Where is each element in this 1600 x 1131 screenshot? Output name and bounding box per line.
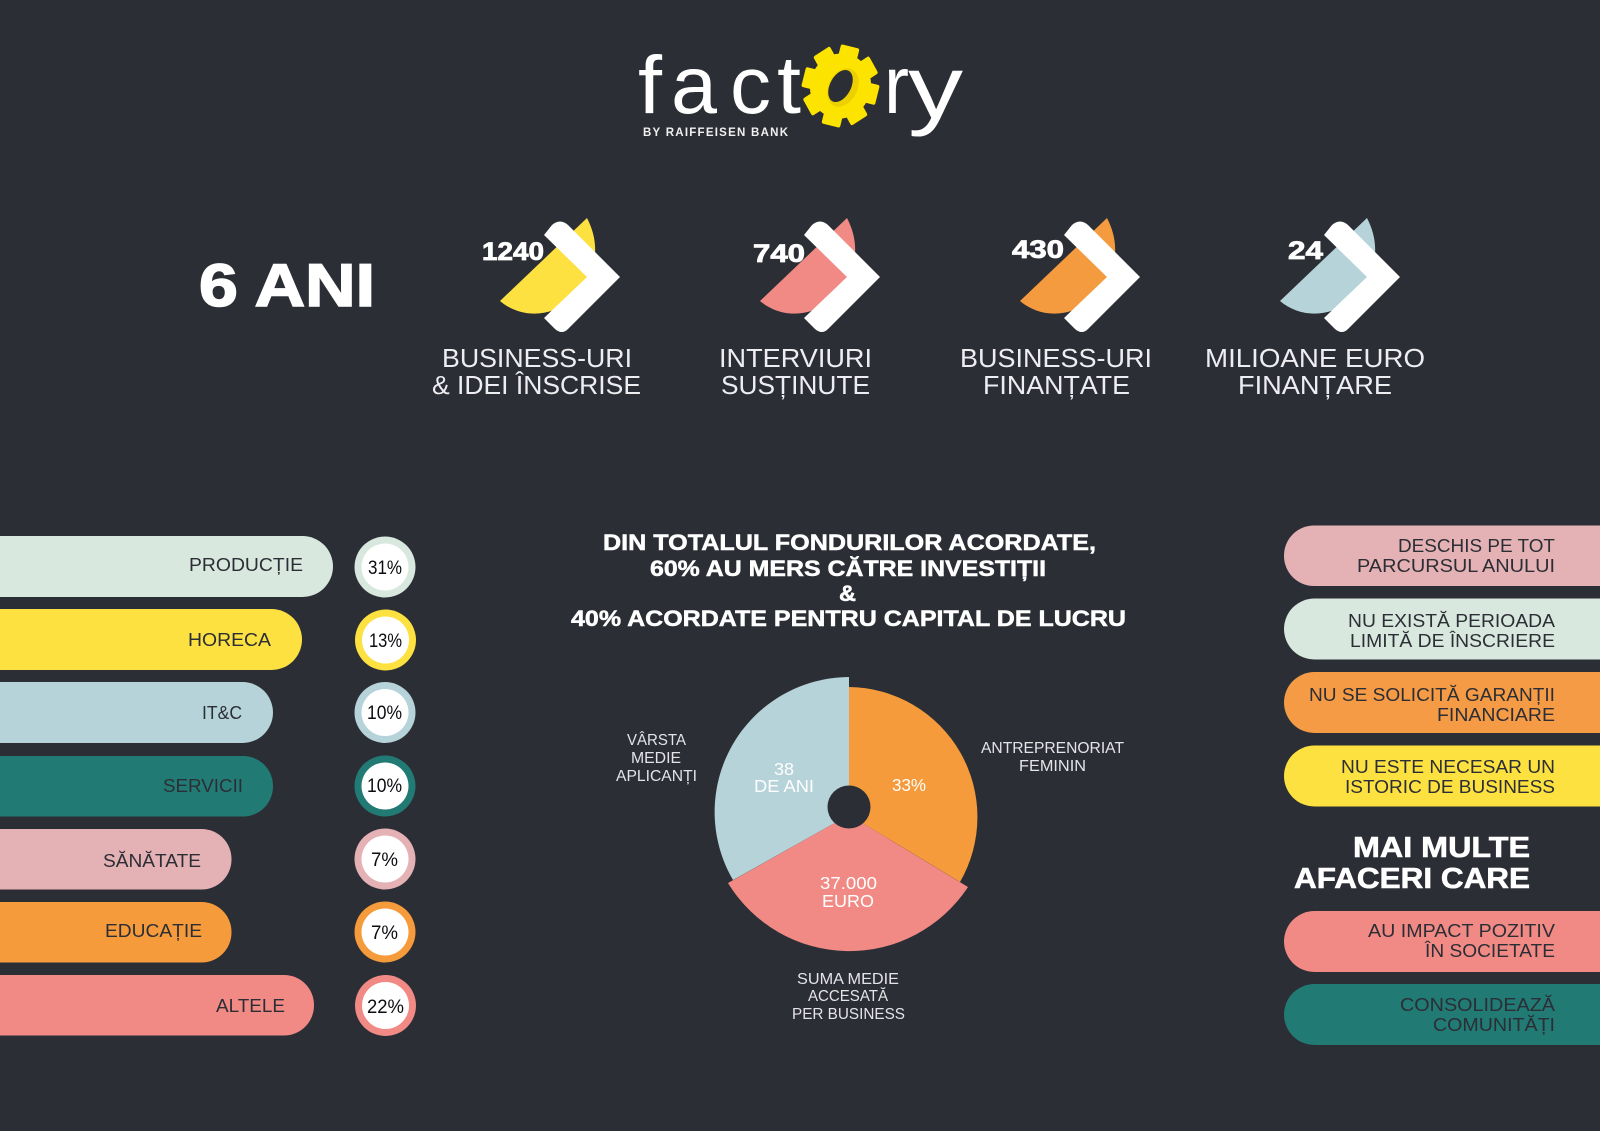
- number: 24: [1288, 237, 1323, 265]
- logo wordmark: f: [638, 40, 662, 131]
- panel: sectors bar list: [0, 536, 416, 1036]
- stat: 24 milioane euro: [1205, 218, 1425, 400]
- heading: funds allocation: &: [839, 581, 856, 606]
- label: BUSINESS-URI: [442, 343, 632, 373]
- pie value: age: DE ANI: [754, 776, 814, 796]
- pill: perioada: NU EXISTĂ PERIOADA: [1348, 610, 1556, 631]
- pill: garantii: FINANCIARE: [1437, 704, 1555, 725]
- label: [432, 343, 641, 400]
- bar: educatie: [0, 902, 416, 962]
- pie value: age: 38: [774, 759, 794, 779]
- pill: istoric: NU ESTE NECESAR UN: [1341, 756, 1555, 777]
- pill: impact: AU IMPACT POZITIV: [1368, 920, 1556, 941]
- pill: deschis: DESCHIS PE TOT: [1398, 535, 1555, 556]
- heading: mai multe afaceri care: AFACERI CARE: [1294, 863, 1530, 895]
- stat: 430 business-uri finantate: [960, 218, 1152, 400]
- bar: sanatate: SĂNĂTATE: [103, 850, 201, 871]
- pie slice: orange: [849, 687, 977, 882]
- icon: coral half disc with chevron: [760, 218, 880, 332]
- pill: impact: ÎN SOCIETATE: [1424, 940, 1555, 961]
- heading: funds allocation: 40% ACORDATE PENTRU CAPITAL DE LUCRU: [571, 606, 1126, 631]
- logo wordmark: c: [730, 40, 771, 131]
- bar: sanatate: 7%: [371, 850, 398, 871]
- pill: istoric: ISTORIC DE BUSINESS: [1345, 776, 1555, 797]
- pie label: varsta medie aplicanti: APLICANȚI: [616, 768, 697, 785]
- heading: mai multe afaceri care: MAI MULTE: [1353, 832, 1530, 864]
- label: MILIOANE EURO: [1205, 343, 1425, 373]
- pill: deschis: [1284, 526, 1600, 586]
- pie centre hole: [828, 786, 870, 828]
- pill: deschis: PARCURSUL ANULUI: [1357, 555, 1555, 576]
- label: [1205, 343, 1425, 400]
- pie slice: coral: [728, 815, 968, 951]
- bar: servicii: [0, 756, 416, 816]
- panel: business impact: [1284, 911, 1600, 1045]
- bar: altele: 22%: [367, 997, 404, 1018]
- bar: educatie: EDUCAȚIE: [105, 920, 202, 941]
- bar: productie: [0, 536, 416, 598]
- bar: horeca: 13%: [369, 631, 402, 652]
- bar: it&c: [0, 682, 416, 743]
- icon: yellow gear: [794, 37, 887, 135]
- pie label: varsta medie aplicanti: VÂRSTA: [627, 730, 686, 749]
- pie slice: blue: [715, 677, 849, 880]
- label: [719, 343, 872, 400]
- pill: istoric: [1284, 746, 1600, 806]
- pill: comunitati: COMUNITĂȚI: [1433, 1014, 1555, 1035]
- logo wordmark: [638, 37, 964, 137]
- heading: funds allocation: [571, 530, 1126, 631]
- pill: comunitati: [1284, 984, 1600, 1045]
- pie label: antreprenoriat feminin: [981, 740, 1124, 775]
- number: 430: [1012, 236, 1064, 264]
- pie value: female: 33%: [892, 775, 926, 795]
- logo wordmark: t: [777, 40, 801, 131]
- pie label: varsta medie aplicanti: MEDIE: [631, 750, 681, 767]
- pie label: suma medie: ACCESATĂ: [808, 986, 888, 1005]
- panel: program advantages: [1284, 526, 1600, 806]
- logo wordmark: y: [908, 37, 964, 137]
- pie value: amount: EURO: [822, 891, 874, 911]
- pie value: amount: 37.000: [820, 873, 877, 893]
- heading: funds allocation: 60% AU MERS CĂTRE INVESTIȚII: [650, 556, 1046, 581]
- pill: perioada: [1284, 598, 1600, 660]
- icon: yellow half disc with chevron: [500, 218, 620, 332]
- logo wordmark: r: [884, 40, 909, 131]
- bar: horeca: [0, 609, 416, 670]
- heading: 6 ani: 6 ANI: [199, 252, 375, 319]
- pill: comunitati: CONSOLIDEAZĂ: [1400, 994, 1556, 1015]
- label: FINANȚATE: [983, 370, 1130, 400]
- pill: garantii: [1284, 672, 1600, 733]
- logo tagline: BY RAIFFEISEN BANK: [643, 127, 789, 139]
- chart: pie: [715, 677, 977, 951]
- bar: productie: 31%: [368, 558, 402, 579]
- bar: sanatate: [0, 828, 416, 890]
- pill: garantii: NU SE SOLICITĂ GARANȚII: [1309, 684, 1555, 705]
- bar: altele: [0, 975, 416, 1036]
- label: INTERVIURI: [719, 343, 872, 373]
- bar: it&c: IT&C: [202, 702, 242, 723]
- bar: altele: ALTELE: [216, 995, 285, 1016]
- label: FINANȚARE: [1238, 370, 1392, 400]
- pill: impact: [1284, 911, 1600, 972]
- bar: servicii: SERVICII: [163, 775, 243, 796]
- pie value: amount: [820, 873, 877, 911]
- pie label: varsta medie aplicanti: [616, 730, 697, 785]
- icon: orange half disc with chevron: [1020, 218, 1140, 332]
- number: 1240: [482, 238, 544, 266]
- logo wordmark: a: [671, 40, 717, 131]
- icon: blue half disc with chevron: [1280, 218, 1400, 332]
- number: 740: [753, 240, 805, 268]
- label: BUSINESS-URI: [960, 343, 1152, 373]
- heading: mai multe afaceri care: [1294, 832, 1530, 895]
- label: & IDEI ÎNSCRISE: [432, 370, 641, 400]
- bar: productie: PRODUCȚIE: [189, 554, 303, 575]
- bar: it&c: 10%: [367, 703, 402, 724]
- stat: 740 interviuri: [719, 218, 880, 400]
- pie label: antreprenoriat feminin: FEMININ: [1019, 758, 1086, 775]
- logo: factory by Raiffeisen Bank: [638, 37, 964, 139]
- bar: horeca: HORECA: [188, 629, 272, 650]
- pie label: suma medie: [792, 971, 905, 1023]
- heading: funds allocation: DIN TOTALUL FONDURILOR ACORDATE,: [603, 530, 1096, 555]
- bar: servicii: 10%: [367, 776, 402, 797]
- pie label: antreprenoriat feminin: ANTREPRENORIAT: [981, 740, 1124, 757]
- pie label: suma medie: PER BUSINESS: [792, 1006, 905, 1023]
- bar: educatie: 7%: [371, 923, 398, 944]
- label: SUSȚINUTE: [721, 370, 870, 400]
- label: [960, 343, 1152, 400]
- pill: perioada: LIMITĂ DE ÎNSCRIERE: [1350, 630, 1555, 651]
- pie label: suma medie: SUMA MEDIE: [797, 971, 899, 988]
- pie value: age: [754, 759, 814, 796]
- stat: 1240 business-uri: [432, 218, 641, 400]
